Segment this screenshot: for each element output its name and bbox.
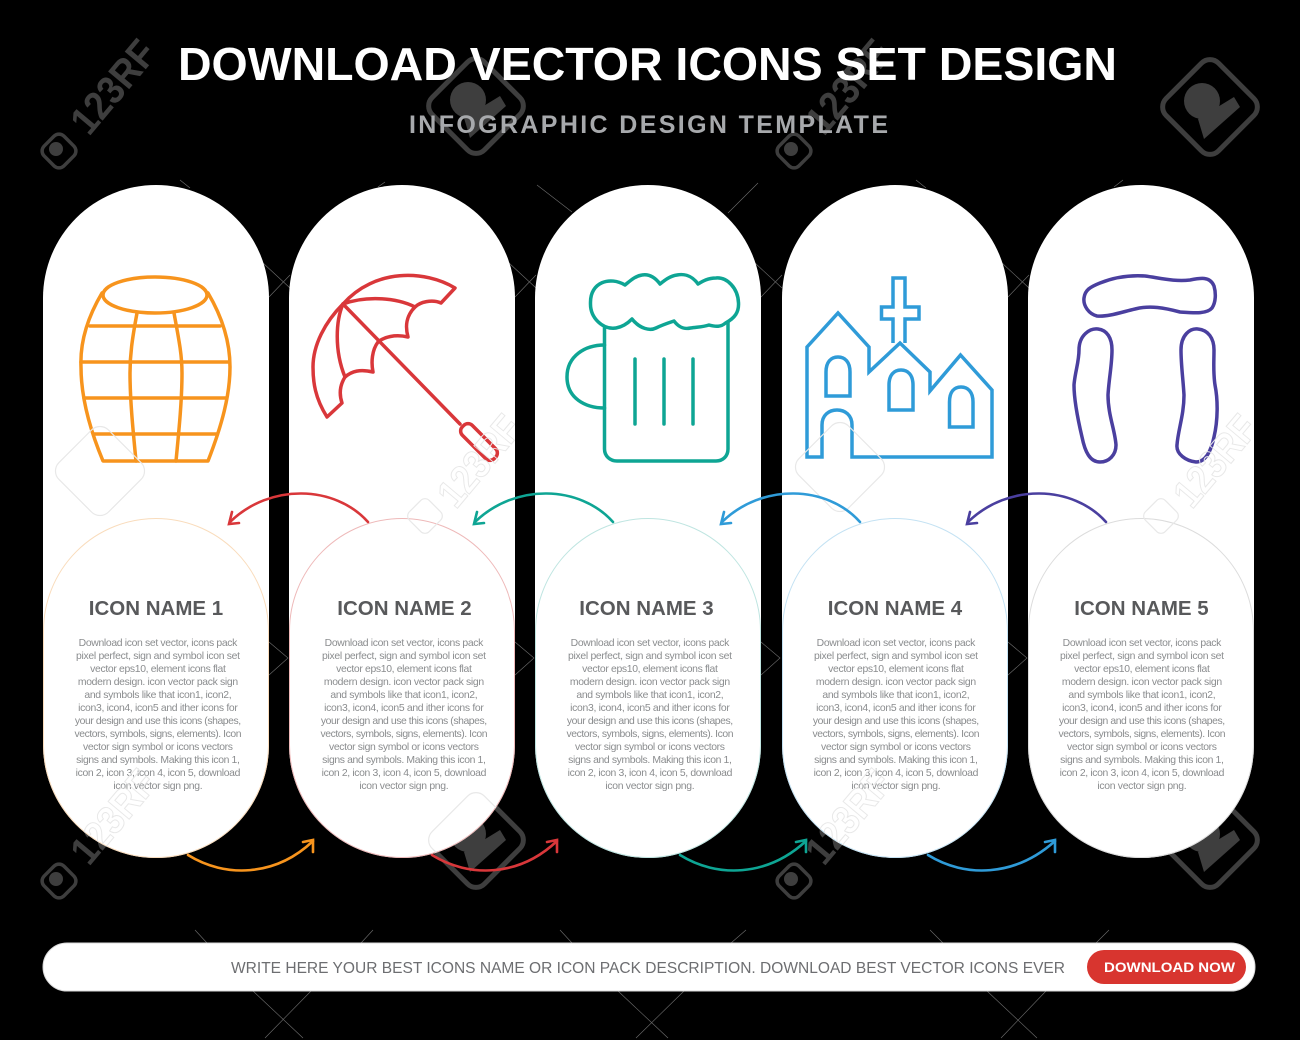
subtitle: INFOGRAPHIC DESIGN TEMPLATE — [409, 111, 888, 139]
bar background — [43, 943, 1255, 991]
faint logo panel 1 — [55, 426, 145, 516]
description 2: pixel perfect, sign and symbol icon set — [322, 651, 486, 662]
description 5: your design and use this icons (shapes, — [1059, 716, 1225, 727]
description 5: signs and symbols. Making this icon 1, — [1060, 755, 1224, 766]
watermark: large logo top right — [1158, 55, 1262, 159]
description 5 — [1058, 638, 1226, 792]
lower oval outline 3 — [536, 518, 760, 858]
top arrow: red — [229, 493, 368, 524]
description 5: pixel perfect, sign and symbol icon set — [1060, 651, 1224, 662]
description 5: icon vector sign png. — [1097, 781, 1187, 792]
description 3: your design and use this icons (shapes, — [567, 716, 733, 727]
description 1: icon3, icon4, icon5 and ither icons for — [78, 703, 238, 714]
description 1: pixel perfect, sign and symbol icon set — [76, 651, 240, 662]
description 3: vector sign symbol or icons vectors — [575, 742, 725, 753]
panel 3: beer — [535, 185, 761, 858]
panel 2 background — [289, 185, 515, 858]
top arrow: blue — [721, 493, 860, 524]
description 4: signs and symbols. Making this icon 1, — [814, 755, 978, 766]
description 3: Download icon set vector, icons pack — [571, 638, 730, 649]
description 3: icon vector sign png. — [605, 781, 695, 792]
description 1: your design and use this icons (shapes, — [75, 716, 241, 727]
description 1: vector eps10, element icons flat — [90, 664, 226, 675]
description 3 — [566, 638, 734, 792]
description 3: vector eps10, element icons flat — [582, 664, 718, 675]
faint logo and wordmark panel 5 — [1143, 412, 1252, 534]
icon: church — [807, 278, 992, 457]
description 2: and symbols like that icon1, icon2, — [330, 690, 478, 701]
watermark: logo and wordmark bottom centre right — [774, 762, 900, 901]
description 3: signs and symbols. Making this icon 1, — [568, 755, 732, 766]
heading 5: ICON NAME 5 — [1074, 597, 1209, 620]
description 5: vectors, symbols, signs, elements). Icon — [1058, 729, 1226, 740]
description 4: modern design. icon vector pack sign — [816, 677, 976, 688]
bottom arrow: orange — [188, 840, 313, 870]
description 1: vector sign symbol or icons vectors — [83, 742, 233, 753]
description 3: pixel perfect, sign and symbol icon set — [568, 651, 732, 662]
description 5: icon 2, icon 3, icon 4, icon 5, download — [1060, 768, 1225, 779]
bottom arrow: red — [432, 840, 557, 870]
description 3: icon 2, icon 3, icon 4, icon 5, download — [568, 768, 733, 779]
panel 1: barrel — [43, 185, 269, 858]
description 3: and symbols like that icon1, icon2, — [576, 690, 724, 701]
description 4: vectors, symbols, signs, elements). Icon — [812, 729, 980, 740]
panel 1 background — [43, 185, 269, 858]
watermark: logo and wordmark bottom left — [39, 762, 165, 901]
panel 4 background — [782, 185, 1008, 858]
heading 1: ICON NAME 1 — [89, 597, 223, 620]
top arrow: purple — [967, 493, 1106, 524]
bottom bar — [43, 943, 1255, 991]
description 5: vector sign symbol or icons vectors — [1067, 742, 1217, 753]
watermark: logo and wordmark top centre right: 123RF — [797, 32, 900, 143]
description 4 — [812, 638, 980, 792]
bar text: WRITE HERE YOUR BEST ICONS NAME OR ICON PACK DESCRIPTION. DOWNLOAD BEST VECTOR ICONS EVER — [231, 960, 1065, 977]
faint logo panel 4 — [795, 422, 885, 512]
top arrow: teal — [474, 493, 613, 524]
description 2: vectors, symbols, signs, elements). Icon — [320, 729, 488, 740]
faint logo and wordmark panel 2: 123RF — [429, 407, 530, 516]
description 1: vectors, symbols, signs, elements). Icon — [74, 729, 242, 740]
description 3: vectors, symbols, signs, elements). Icon — [566, 729, 734, 740]
description 4: vector sign symbol or icons vectors — [821, 742, 971, 753]
description 1: modern design. icon vector pack sign — [78, 677, 238, 688]
description 2: vector eps10, element icons flat — [336, 664, 472, 675]
description 2: modern design. icon vector pack sign — [324, 677, 484, 688]
watermark: large logo top centre left — [424, 54, 528, 158]
lower oval outline 5 — [1028, 518, 1254, 858]
watermark: logo and wordmark bottom centre right: 123RF — [797, 762, 900, 873]
panel 3 background — [535, 185, 761, 858]
description 5: icon3, icon4, icon5 and ither icons for — [1062, 703, 1222, 714]
description 4: icon3, icon4, icon5 and ither icons for — [816, 703, 976, 714]
description 1: icon vector sign png. — [113, 781, 203, 792]
panel 4: church — [782, 185, 1008, 858]
lower oval outline 4 — [782, 518, 1008, 858]
panel 5 background — [1028, 185, 1254, 858]
description 3: modern design. icon vector pack sign — [570, 677, 730, 688]
description 1: icon 2, icon 3, icon 4, icon 5, download — [76, 768, 241, 779]
title: DOWNLOAD VECTOR ICONS SET DESIGN — [178, 38, 1117, 90]
description 1: signs and symbols. Making this icon 1, — [76, 755, 240, 766]
download button — [1087, 950, 1246, 984]
description 4: icon vector sign png. — [851, 781, 941, 792]
description 4: icon 2, icon 3, icon 4, icon 5, download — [814, 768, 979, 779]
description 2: icon3, icon4, icon5 and ither icons for — [324, 703, 484, 714]
description 2 — [320, 638, 488, 792]
dark watermarks — [39, 32, 1262, 901]
description 5: modern design. icon vector pack sign — [1062, 677, 1222, 688]
lower oval outline 2 — [290, 518, 514, 858]
description 3: icon3, icon4, icon5 and ither icons for — [570, 703, 730, 714]
faint wordmark panel 4 lower: 123RF — [797, 762, 900, 873]
description 1: Download icon set vector, icons pack — [79, 638, 238, 649]
description 4: and symbols like that icon1, icon2, — [822, 690, 970, 701]
description 4: Download icon set vector, icons pack — [817, 638, 976, 649]
watermark: large logo bottom centre left — [424, 788, 528, 892]
description 1: and symbols like that icon1, icon2, — [84, 690, 232, 701]
faint wordmark panel 1 lower: 123RF — [62, 762, 165, 873]
description 5: and symbols like that icon1, icon2, — [1068, 690, 1216, 701]
description 2: icon 2, icon 3, icon 4, icon 5, download — [322, 768, 487, 779]
icon: stone arch — [1074, 276, 1217, 462]
watermark: large logo bottom right — [1158, 788, 1262, 892]
description 2: your design and use this icons (shapes, — [321, 716, 487, 727]
watermark: logo and wordmark top left: 123RF — [62, 32, 165, 143]
icon: umbrella — [313, 275, 500, 463]
download button: DOWNLOAD NOW — [1104, 959, 1236, 975]
watermark: logo and wordmark top left — [39, 32, 165, 171]
watermark: logo and wordmark top centre right — [774, 32, 900, 171]
watermark: logo and wordmark bottom left: 123RF — [62, 762, 165, 873]
faint watermarks on white panels — [55, 412, 1252, 853]
heading 3: ICON NAME 3 — [579, 597, 714, 620]
panel 2: umbrella — [289, 185, 515, 858]
description 2: icon vector sign png. — [359, 781, 449, 792]
description 4: vector eps10, element icons flat — [828, 664, 964, 675]
panel 5: stonehenge — [1028, 185, 1254, 858]
description 4: pixel perfect, sign and symbol icon set — [814, 651, 978, 662]
description 4: your design and use this icons (shapes, — [813, 716, 979, 727]
description 5: Download icon set vector, icons pack — [1063, 638, 1222, 649]
faint logo panel 2 lower — [428, 792, 496, 853]
lower oval outline 1 — [44, 518, 268, 858]
heading 4: ICON NAME 4 — [828, 597, 963, 620]
faint logo and wordmark panel 2 — [407, 412, 515, 534]
description 2: vector sign symbol or icons vectors — [329, 742, 479, 753]
icon: beer mug — [567, 275, 739, 461]
icon: barrel — [81, 277, 230, 461]
bottom arrow: teal — [680, 840, 806, 870]
heading 2: ICON NAME 2 — [337, 597, 472, 620]
description 2: Download icon set vector, icons pack — [325, 638, 484, 649]
faint logo and wordmark panel 5: 123RF — [1165, 407, 1266, 516]
description 1 — [74, 638, 242, 792]
description 5: vector eps10, element icons flat — [1074, 664, 1210, 675]
description 2: signs and symbols. Making this icon 1, — [322, 755, 486, 766]
bottom arrow: blue — [928, 840, 1055, 870]
